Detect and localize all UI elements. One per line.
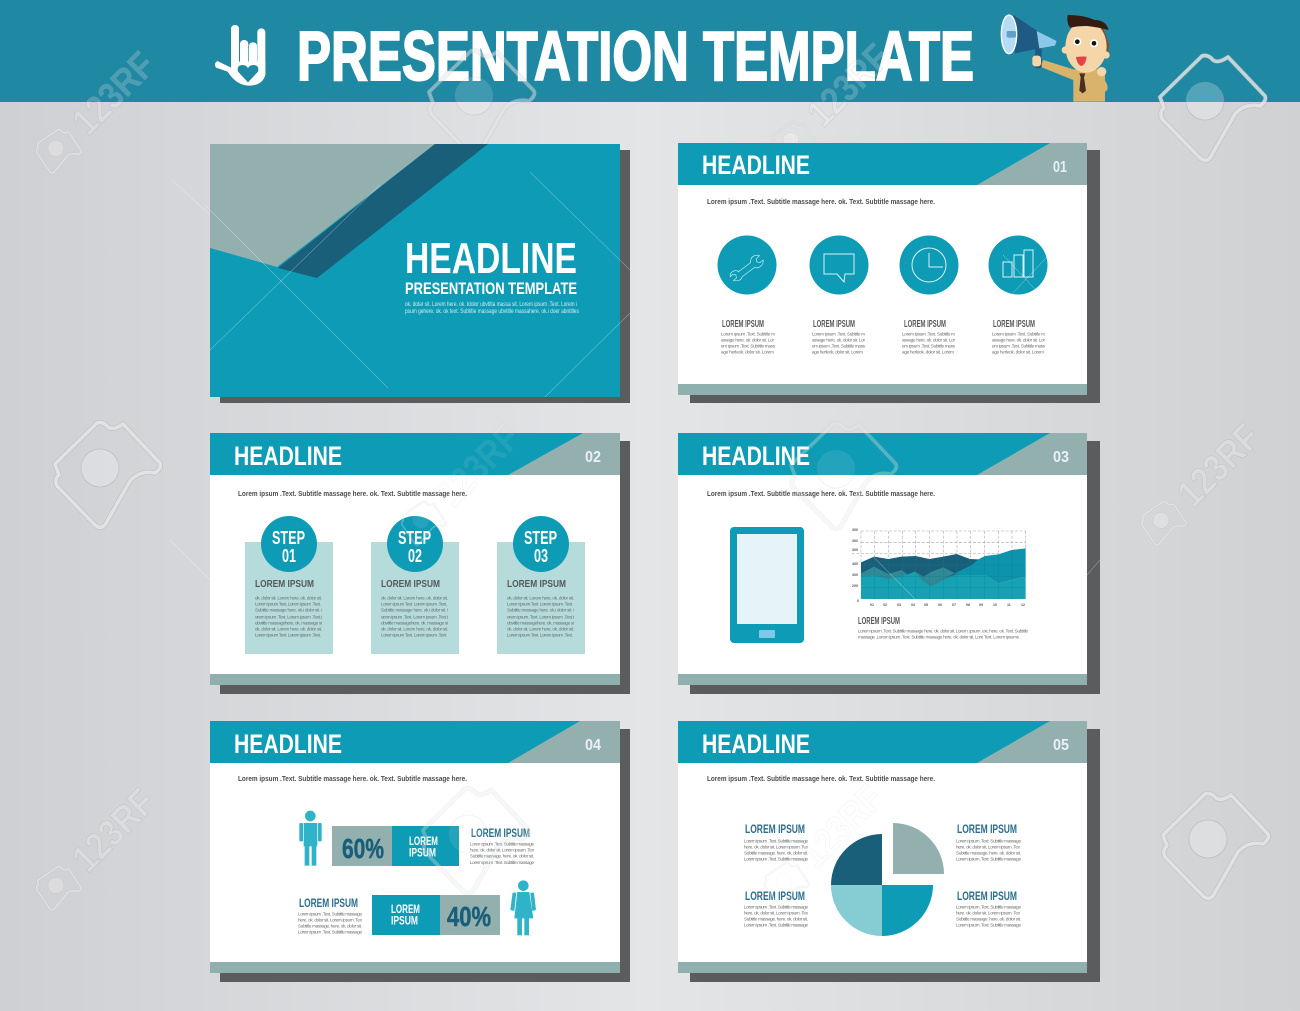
text: top right: Lorem ipsum .Text. Subtitle massage	[956, 838, 1021, 844]
text: bottom left: LOREM IPSUM	[745, 891, 805, 903]
panel: slide 04 percentages	[210, 721, 630, 982]
column 3 text: assage here. ok. dolor sit. Lor	[902, 338, 955, 342]
column 4 text: em ipsum .Text. Subtitle mass	[992, 344, 1046, 348]
cover subtitle: PRESENTATION TEMPLATE	[405, 280, 577, 298]
bar: 60 percent: 60%	[342, 833, 384, 864]
chart x axis labels: 10	[993, 603, 997, 607]
icon: tablet	[730, 527, 804, 643]
step 1 card: Lorem ipsum Text. Lorem ipsum .Text.	[255, 602, 321, 606]
column 3 text: age herleok. dolor sit. Lorem	[902, 350, 954, 354]
text: bottom right: Lorem ipsum .Text. Subtitle massage	[956, 922, 1021, 928]
text: top left: Lorem ipsum .Text. Subtitle massage	[744, 856, 808, 862]
watermarks on background: 123RF	[1170, 416, 1269, 515]
icon: wrench	[718, 236, 776, 294]
column 2 text: LOREM IPSUM	[813, 319, 855, 330]
chart x axis labels	[870, 603, 1025, 607]
watermark stamps and lines over slides: 123RF	[793, 777, 892, 876]
watermark stamps and lines over slides	[170, 172, 1100, 910]
text: women: LOREM IPSUM	[299, 898, 358, 910]
chart x axis labels: 01	[870, 603, 874, 607]
step 3 card: 03	[534, 546, 548, 566]
text: women	[298, 898, 363, 934]
text: bottom right: Lorem ipsum .Text. Subtitle massage	[956, 904, 1021, 910]
step 3 card: ok. dolor sit. Lorem here. ok. dolor sit.	[507, 626, 574, 632]
panel: slide 05 pie	[678, 721, 1100, 982]
icon: man	[299, 811, 322, 866]
step 3 card: ubvtitle massagehere. ok. massage si	[507, 620, 574, 626]
icon: man with megaphone	[1001, 15, 1110, 102]
column 1 text: em ipsum .Text. Subtitle mass	[721, 344, 776, 348]
slide number: 04	[585, 737, 601, 754]
text: top right	[956, 824, 1021, 862]
icon: clock	[900, 236, 958, 294]
text: women: here. ok. dolor sit. Lorem ipsum .Tex	[298, 918, 363, 922]
subtitle: Lorem ipsum .Text. Subtitle massage here. ok. Text. Subtitle massage here.	[238, 489, 467, 498]
headline: HEADLINE	[702, 150, 810, 180]
pie chart	[831, 823, 944, 936]
text: top right: Lorem ipsum .Text. Subtitle massage	[956, 856, 1021, 862]
chart x axis labels: 08	[966, 603, 970, 607]
step 1 card: ok. dolor sit. Lorem here. ok. dolor sit.	[255, 596, 322, 600]
bar: 60 percent: IPSUM	[409, 846, 436, 860]
text: bottom right: here. ok. dolor sit. Lorem ipsum .Tex	[956, 910, 1021, 916]
step 1 card: STEP	[272, 528, 305, 548]
column 1 text: age herleok. dolor sit. Lorem	[721, 350, 774, 354]
bar: 40 percent: 40%	[447, 901, 491, 932]
column 4 text	[992, 319, 1046, 354]
text: men: Lorem ipsum .Text. Subtitle massage	[470, 860, 534, 865]
bar: 40 percent	[372, 895, 500, 935]
text: top right: LOREM IPSUM	[957, 824, 1017, 836]
column 2 text: em ipsum .Text. Subtitle mass	[812, 344, 866, 348]
panel: slide 03 tablet and chart	[678, 433, 1100, 694]
bar: 60 percent	[332, 826, 459, 866]
chart y axis labels	[852, 528, 859, 603]
column 2 text: age herleok. dolor sit. Lorem	[812, 350, 863, 354]
icon: bar chart	[988, 236, 1048, 294]
title: PRESENTATION TEMPLATE	[297, 17, 974, 95]
text: women: Lorem ipsum .Text. Subtitle massage	[298, 930, 362, 934]
step 1 card: Lorem ipsum Text. Lorem ipsum .Text.	[255, 632, 321, 638]
column 3 text	[902, 319, 956, 354]
cover headline: HEADLINE	[405, 234, 577, 283]
step 1 card	[245, 516, 333, 654]
chart x axis labels: 02	[883, 603, 887, 607]
subtitle: Lorem ipsum .Text. Subtitle massage here. ok. Text. Subtitle massage here.	[238, 774, 467, 783]
chart y axis labels: 0	[857, 599, 859, 603]
chart x axis labels: 05	[924, 603, 928, 607]
column 2 text: assage here. ok. dolor sit. Lor	[812, 338, 865, 342]
watermark stamps and lines over slides: 123RF	[430, 416, 529, 515]
column 4 text: Lorem ipsum .Text. Subtitle m	[992, 332, 1045, 336]
subtitle: Lorem ipsum .Text. Subtitle massage here. ok. Text. Subtitle massage here.	[707, 489, 935, 498]
text: top left: Lorem ipsum .Text. Subtitle massage	[744, 838, 808, 844]
step 2 card: Subtitle massage here. ok.i dolor sit. i	[381, 608, 448, 612]
step 3 card: orem ipsum .Text. Lorem ipsum .Text.t	[507, 614, 575, 620]
text: top left: Subtitle massage. here. ok. dolor sit.	[744, 850, 808, 856]
column 4 text: LOREM IPSUM	[993, 319, 1035, 330]
watermarks on background: 123RF	[65, 781, 164, 880]
column 3 text: Lorem ipsum .Text. Subtitle m	[902, 332, 955, 336]
step 2 card	[371, 516, 459, 654]
step 3 card: Lorem ipsum Text. Lorem ipsum .Text.	[507, 632, 573, 638]
step 2 card: 02	[408, 546, 422, 566]
step 3 card: ok. dolor sit. Lorem here. ok. dolor sit.	[507, 596, 574, 600]
area chart	[852, 528, 1026, 607]
chart x axis labels: 06	[938, 603, 942, 607]
bar: 40 percent: IPSUM	[391, 914, 418, 928]
chart caption: LOREM IPSUM	[858, 616, 900, 627]
text: bottom left: Lorem ipsum .Text. Subtitle massage	[744, 904, 808, 910]
step 3 card: LOREM IPSUM	[507, 579, 566, 590]
chart x axis labels: 03	[897, 603, 901, 607]
text: men: LOREM IPSUM	[471, 828, 530, 840]
icon: woman	[510, 880, 536, 935]
chart y axis labels: 400	[852, 562, 858, 566]
text: bottom right: LOREM IPSUM	[957, 891, 1017, 903]
step 1 card: orem ipsum .Text. Lorem ipsum .Text.t	[255, 614, 323, 620]
text: bottom left	[744, 891, 809, 928]
cover text: ok. dolar sit. Lorem here. ok. Idolor ubvtitla massa sit. Lorem ipsum .Text. Lorem i	[405, 302, 577, 308]
text: men: Subtitle massage. here. ok. dolor sit.	[470, 854, 534, 858]
step 2 card: STEP	[398, 528, 431, 548]
step 2 card: ubvtitle massagehere. ok. massage si	[381, 620, 448, 626]
chart x axis labels: 09	[979, 603, 983, 607]
column 4 text: age herleok. dolor sit. Lorem	[992, 350, 1044, 354]
headline: HEADLINE	[234, 729, 342, 759]
panel: slide 02 steps	[210, 433, 630, 694]
chart x axis labels: 11	[1007, 603, 1011, 607]
step 3 card: Subtitle massage here. ok.i dolor sit. i	[507, 608, 574, 612]
panel: cover slide	[210, 144, 630, 403]
chart y axis labels: 200	[852, 584, 858, 588]
step 2 card: Lorem ipsum Text. Lorem ipsum .Text.	[381, 632, 447, 638]
icon: speech bubble	[810, 236, 868, 294]
text: top left	[744, 824, 809, 862]
step 1 card: 01	[282, 546, 296, 566]
subtitle: Lorem ipsum .Text. Subtitle massage here. ok. Text. Subtitle massage here.	[707, 774, 935, 783]
text: bottom right	[956, 891, 1021, 928]
chart caption: massage .Lorem ipsum .Text. Subtitle massage here. ok. dolor sit. Lore Text. Lorem ipsums	[858, 634, 1020, 640]
text: men: here. ok. dolor sit. Lorem ipsum .Tex	[470, 848, 535, 852]
bar: 40 percent: LOREM	[391, 902, 420, 916]
panel: slide 01 icons	[678, 143, 1100, 403]
chart x axis labels: 04	[911, 603, 915, 607]
column 2 text: Lorem ipsum .Text. Subtitle m	[812, 332, 865, 336]
text: bottom right: Subtitle massage. here. ok. dolor sit.	[956, 916, 1021, 922]
watermarks on background: 123RF	[800, 36, 899, 135]
chart caption: Lorem ipsum .Text. Subtitle massage here. ok. dolor sit. Lorem .ipsum .ext. here. ok. Text. Subtitle	[858, 628, 1028, 634]
column 1 text: Lorem ipsum .Text. Subtitle m	[721, 332, 775, 336]
step 3 card: STEP	[524, 528, 557, 548]
text: men	[470, 828, 535, 865]
slide number: 02	[585, 449, 601, 466]
chart x axis labels: 07	[952, 603, 956, 607]
step 3 card	[497, 516, 585, 654]
text: top right: here. ok. dolor sit. Lorem ipsum .Tex	[956, 844, 1021, 850]
text: top left: LOREM IPSUM	[745, 824, 805, 836]
column 1 text	[721, 319, 776, 354]
icon: rock hand with heart	[215, 25, 265, 86]
step 1 card: LOREM IPSUM	[255, 579, 314, 590]
step 2 card: ok. dolor sit. Lorem here. ok. dolor sit.	[381, 626, 448, 632]
step 2 card: orem ipsum .Text. Lorem ipsum .Text.t	[381, 614, 449, 620]
column 4 text: assage here. ok. dolor sit. Lor	[992, 338, 1045, 342]
step 1 card: Subtitle massage here. ok.i dolor sit. i	[255, 608, 322, 612]
cover text: psum gehere. ok. ok text. Subtitle massage ubvtitle massahere. ok.i doer abntitles	[405, 309, 579, 315]
step 2 card: Lorem ipsum Text. Lorem ipsum .Text.	[381, 602, 447, 606]
text: top right: Subtitle massage. here. ok. dolor sit.	[956, 850, 1021, 856]
subtitle: Lorem ipsum .Text. Subtitle massage here. ok. Text. Subtitle massage here.	[707, 197, 935, 206]
chart y axis labels: 300	[852, 548, 858, 552]
column 2 text	[812, 319, 866, 354]
step 2 card: LOREM IPSUM	[381, 579, 440, 590]
column 1 text: LOREM IPSUM	[722, 319, 764, 330]
chart y axis labels: 300	[852, 539, 858, 543]
slide number: 01	[1053, 159, 1067, 176]
chart caption	[858, 616, 1028, 640]
text: top left: here. ok. dolor sit. Lorem ipsum .Tex	[744, 844, 809, 850]
watermarks on background: 123RF	[65, 44, 164, 143]
step 1 card: ok. dolor sit. Lorem here. ok. dolor sit.	[255, 626, 322, 632]
column 3 text: em ipsum .Text. Subtitle mass	[902, 344, 956, 348]
text: women: Lorem ipsum .Text. Subtitle massage	[298, 912, 362, 916]
chart y axis labels: 300	[852, 573, 858, 577]
slide number: 05	[1053, 737, 1069, 754]
step 2 card: ok. dolor sit. Lorem here. ok. dolor sit.	[381, 596, 448, 600]
cover text	[405, 302, 579, 315]
text: bottom left: Subtitle massage. here. ok. dolor sit.	[744, 916, 808, 922]
headline: HEADLINE	[702, 729, 810, 759]
header band	[0, 0, 1300, 102]
chart y axis labels: 300	[852, 528, 858, 532]
headline: HEADLINE	[234, 441, 342, 471]
bar: 60 percent: LOREM	[409, 834, 438, 848]
column 3 text: LOREM IPSUM	[904, 319, 946, 330]
slide number: 03	[1053, 449, 1069, 466]
text: men: Lorem ipsum .Text. Subtitle massage	[470, 842, 534, 846]
text: women: Subtitle massage. here. ok. dolor sit.	[298, 924, 362, 928]
step 3 card: Lorem ipsum Text. Lorem ipsum .Text.	[507, 602, 573, 606]
headline: HEADLINE	[702, 441, 810, 471]
text: bottom left: here. ok. dolor sit. Lorem ipsum .Tex	[744, 910, 809, 916]
text: bottom left: Lorem ipsum .Text. Subtitle massage	[744, 922, 808, 928]
chart x axis labels: 12	[1021, 603, 1025, 607]
step 1 card: ubvtitle massagehere. ok. massage si	[255, 620, 322, 626]
column 1 text: assage here. ok. dolor sit. Lor	[721, 338, 774, 342]
